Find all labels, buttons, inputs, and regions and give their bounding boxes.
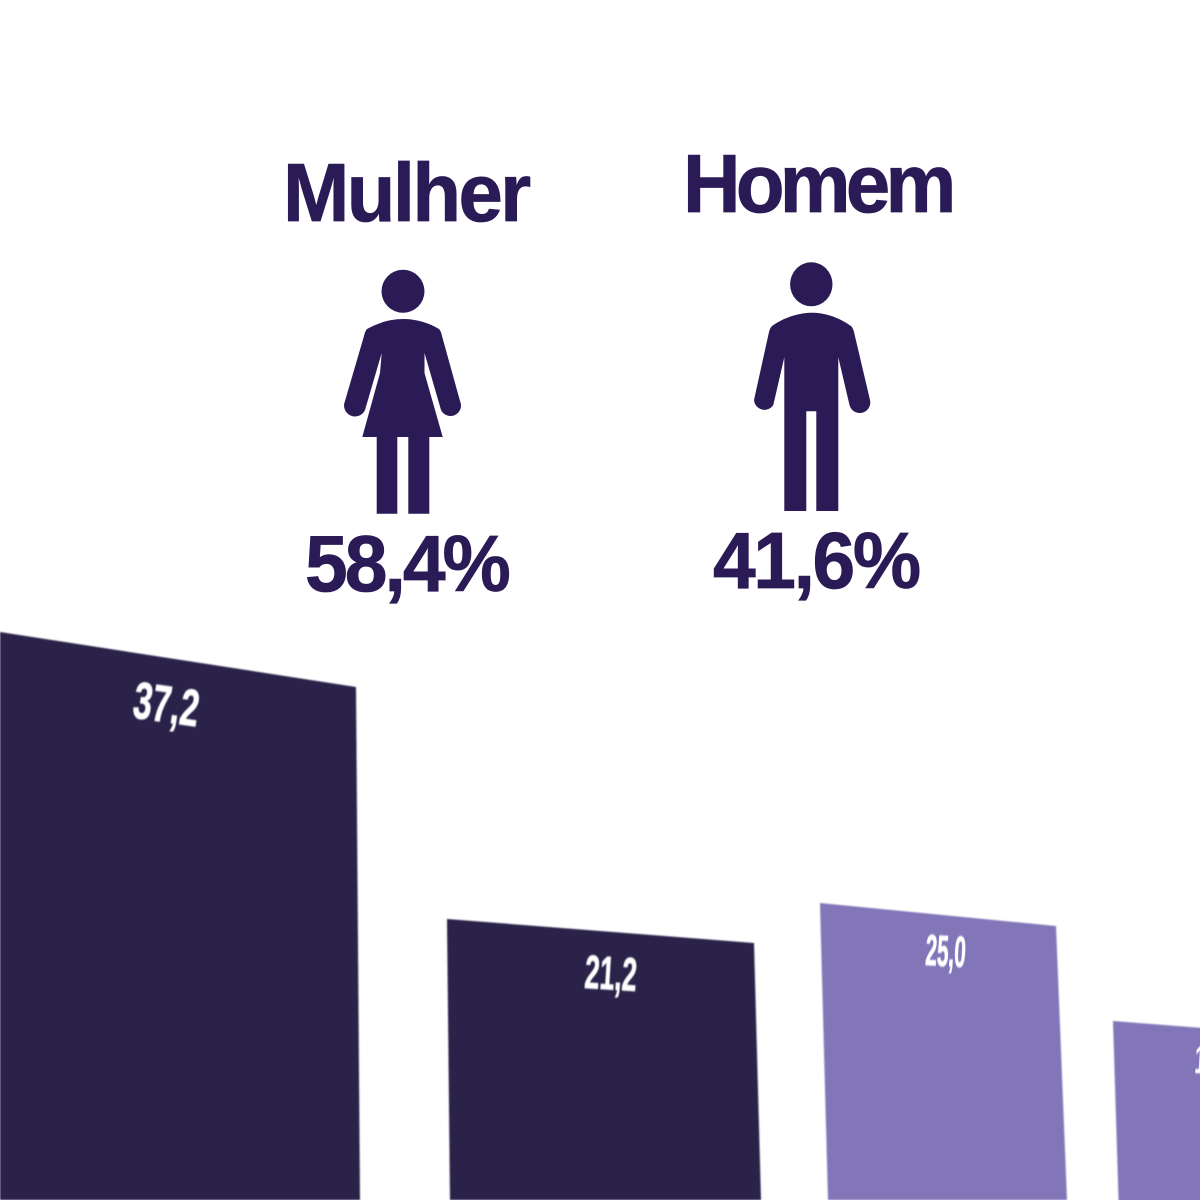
bar: 25,0: [820, 903, 1067, 1200]
heading: Homem: Homem: [683, 138, 952, 230]
bar label: 21,2: 21,2: [583, 946, 639, 1002]
heading: Mulher: Mulher: [283, 147, 531, 239]
icon: woman: [344, 270, 461, 514]
icon: man: [754, 262, 870, 511]
value: woman percentage: 58,4%: [305, 519, 509, 608]
bar: cropped at right edge: [1113, 1021, 1200, 1200]
bar label: 25,0: 25,0: [924, 927, 967, 977]
bar label: 37,2: 37,2: [130, 672, 203, 738]
bar: 37,2: [0, 632, 360, 1200]
value: man percentage: 41,6%: [713, 516, 919, 605]
bar: 21,2: [447, 919, 761, 1200]
